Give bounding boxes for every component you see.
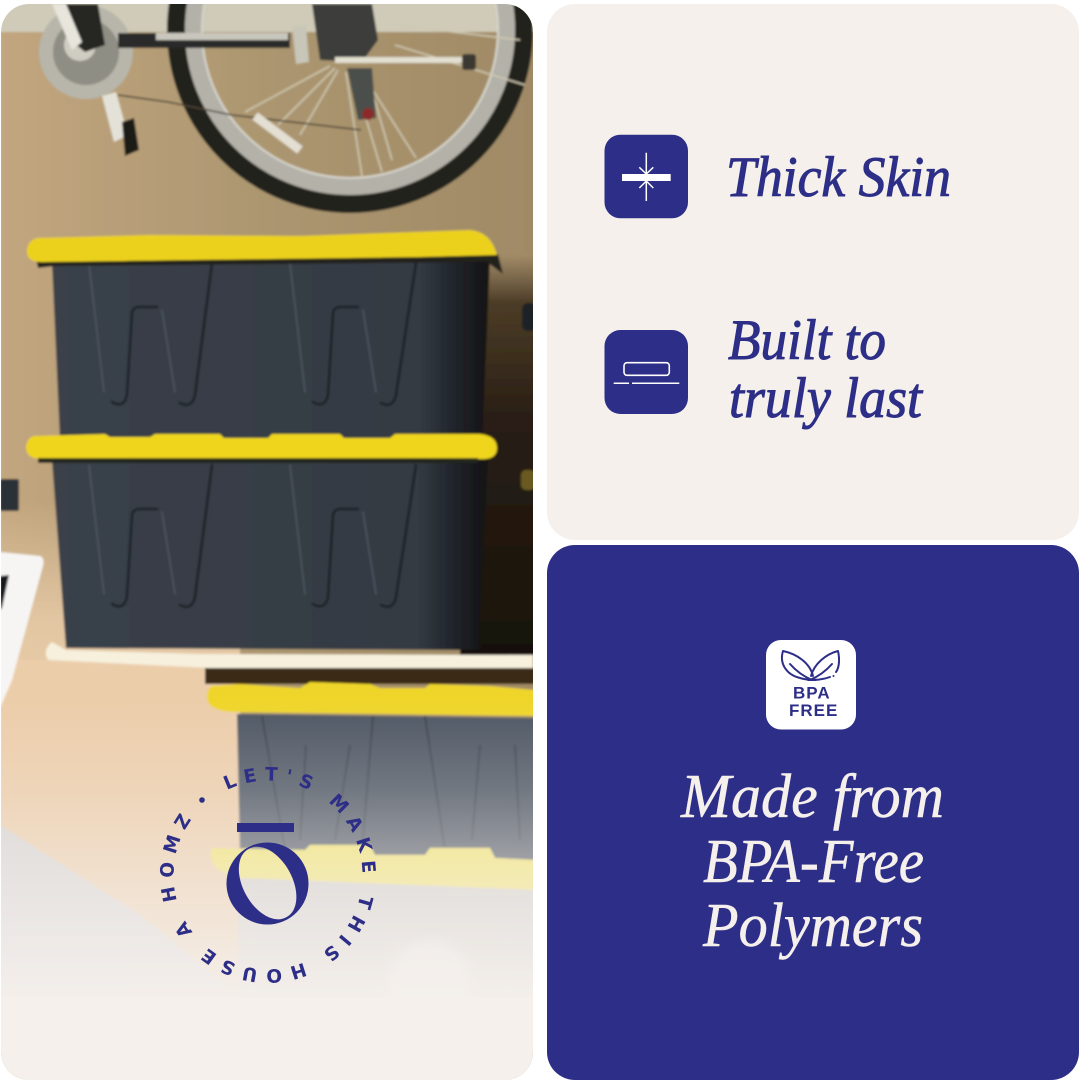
badge label <box>789 684 838 720</box>
logo mark ring <box>226 842 308 925</box>
panel: storage totes photo <box>0 0 540 1080</box>
tote reflection lid <box>211 845 535 890</box>
heading: made from bpa-free polymers: BPA-Free <box>703 828 924 896</box>
badge label: BPA <box>793 684 831 702</box>
badge ring text: LET'S MAKE THIS HOUSE A HOMZ <box>160 766 376 983</box>
floor wedge <box>1 826 181 952</box>
icon: durable <box>604 330 688 414</box>
tote three <box>237 714 535 862</box>
logo: circular badge <box>160 766 376 983</box>
heading: made from bpa-free polymers: Polymers <box>702 892 923 960</box>
shelf <box>46 642 533 670</box>
heading: made from bpa-free polymers: Made from <box>680 763 944 831</box>
badge dot <box>199 797 205 803</box>
panel: features <box>547 4 1079 540</box>
shadows and right dark wall <box>460 255 540 655</box>
heading: built to truly last: Built to <box>728 309 886 372</box>
badge label: FREE <box>789 701 838 720</box>
tote one <box>52 258 490 445</box>
logo mark bar <box>237 823 294 832</box>
heading: built to truly last: truly last <box>729 367 923 430</box>
floor surface <box>238 877 533 986</box>
icon: thickness <box>604 135 688 218</box>
bicycle wheel <box>118 0 525 204</box>
heading: made from bpa-free polymers <box>680 763 944 960</box>
icon: bpa free leaf badge <box>766 640 856 730</box>
bicycle crank and frame <box>39 4 476 156</box>
wall hooks <box>521 302 533 332</box>
panel: bpa free <box>547 545 1079 1080</box>
white object on left <box>0 552 44 708</box>
heading: built to truly last <box>728 309 923 430</box>
heading: thick skin: Thick Skin <box>726 146 951 209</box>
tote two <box>52 458 488 650</box>
